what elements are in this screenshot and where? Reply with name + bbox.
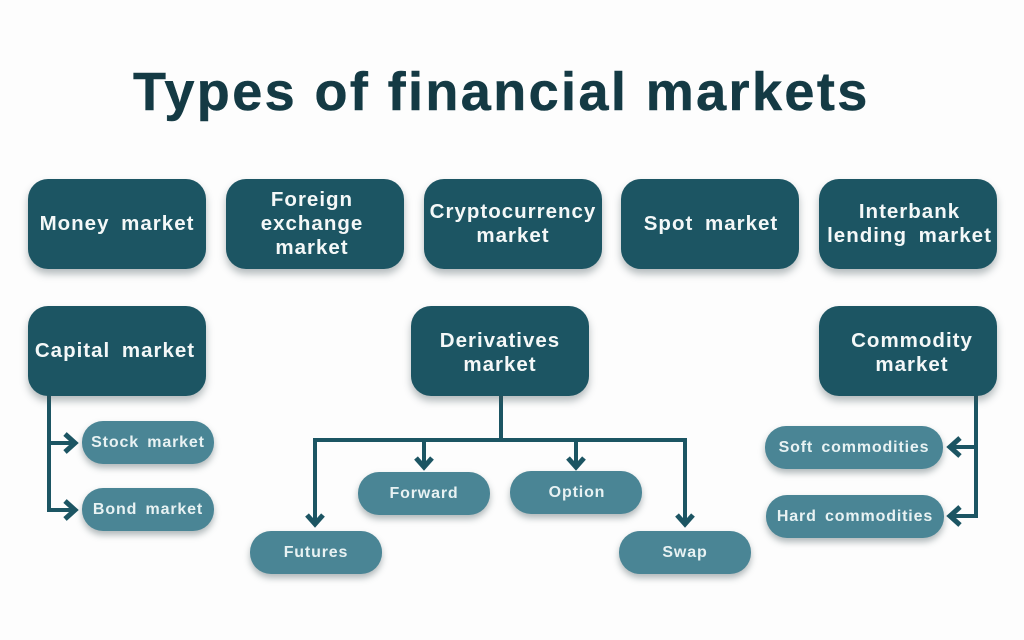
box: spot market	[621, 179, 799, 269]
box: money market	[28, 179, 206, 269]
arrow: commodity market to hard commodities	[950, 440, 976, 525]
box: cryptocurrency market	[424, 179, 602, 269]
pill: forward: Forward	[389, 484, 459, 502]
box: commodity market	[819, 306, 997, 396]
arrow: derivatives market to futures	[307, 394, 501, 524]
pill: bond market: Bond market	[93, 500, 203, 518]
box: cryptocurrency market: Cryptocurrency	[430, 200, 596, 223]
box: derivatives market	[411, 306, 589, 396]
pill: futures	[250, 531, 382, 574]
pill: swap: Swap	[662, 544, 708, 560]
pill: soft commodities: Soft commodities	[779, 438, 929, 456]
box: foreign exchange market: market	[275, 236, 349, 259]
box: money market: Money market	[40, 212, 194, 235]
arrow: derivatives market to option	[568, 440, 584, 467]
box: interbank lending market: Interbank	[859, 200, 960, 223]
arrow: commodity market to soft commodities	[950, 394, 976, 456]
pill: hard commodities: Hard commodities	[777, 508, 933, 524]
arrow: derivatives market to swap	[501, 440, 693, 524]
box: commodity market: market	[875, 352, 949, 376]
pill: forward	[358, 472, 490, 515]
box: spot market: Spot market	[644, 212, 778, 235]
box: capital market: Capital market	[35, 339, 195, 362]
pill: stock market: Stock market	[91, 434, 205, 450]
box: derivatives market: market	[463, 352, 537, 376]
pill: bond market	[82, 488, 214, 531]
arrow: capital market to stock market	[49, 394, 75, 452]
arrow: capital market to bond market	[49, 440, 75, 519]
box: foreign exchange market	[226, 179, 404, 269]
pill: futures: Futures	[284, 544, 348, 560]
arrow: derivatives market to forward	[416, 440, 432, 467]
title: Types of financial markets	[133, 62, 870, 122]
pill: swap	[619, 531, 751, 574]
box: cryptocurrency market: market	[476, 224, 550, 247]
box: foreign exchange market: Foreign	[271, 188, 353, 211]
box: capital market	[28, 306, 206, 396]
box: derivatives market: Derivatives	[440, 328, 560, 352]
pill: soft commodities	[765, 426, 943, 469]
pill: option	[510, 471, 642, 514]
box: interbank lending market	[819, 179, 997, 269]
box: interbank lending market: lending market	[827, 224, 992, 247]
box: commodity market: Commodity	[851, 328, 973, 352]
pill: stock market	[82, 421, 214, 464]
pill: hard commodities	[766, 495, 944, 538]
box: foreign exchange market: exchange	[261, 212, 363, 235]
pill: option: Option	[549, 484, 605, 500]
